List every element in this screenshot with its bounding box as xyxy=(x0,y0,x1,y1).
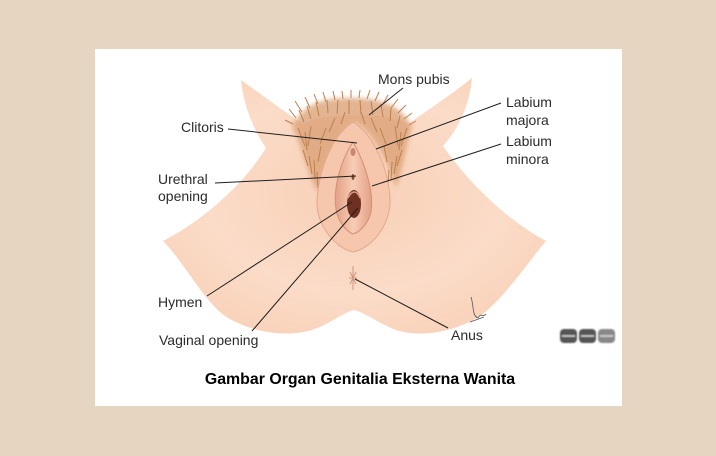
vaginal opening xyxy=(347,190,361,218)
anatomical illustration xyxy=(163,78,546,334)
label: Urethral opening: opening xyxy=(158,188,208,204)
icon: watermark badges xyxy=(560,329,615,343)
hymen xyxy=(348,192,360,198)
body silhouette xyxy=(163,78,546,334)
label: Labium minora: minora xyxy=(506,151,549,167)
pubic hair xyxy=(285,90,416,192)
anus xyxy=(349,266,357,290)
urethral opening xyxy=(352,174,354,180)
label: Anus: Anus xyxy=(451,327,483,343)
label: Vaginal opening: Vaginal opening xyxy=(159,332,258,348)
caption: Gambar Organ Genitalia Eksterna Wanita xyxy=(205,371,515,388)
labia minora xyxy=(335,142,372,234)
white panel xyxy=(95,49,622,406)
leader lines xyxy=(207,88,501,331)
label: Mons pubis: Mons pubis xyxy=(378,71,450,87)
labia majora xyxy=(317,122,390,252)
artist signature xyxy=(470,297,486,322)
clitoris xyxy=(350,148,356,156)
label: Clitoris: Clitoris xyxy=(181,119,224,135)
label: Labium majora: majora xyxy=(506,112,549,128)
label: Urethral opening: Urethral xyxy=(158,171,208,187)
label: Hymen: Hymen xyxy=(158,294,202,310)
label: Labium minora: Labium xyxy=(506,133,552,149)
label: Labium majora: Labium xyxy=(506,94,552,110)
